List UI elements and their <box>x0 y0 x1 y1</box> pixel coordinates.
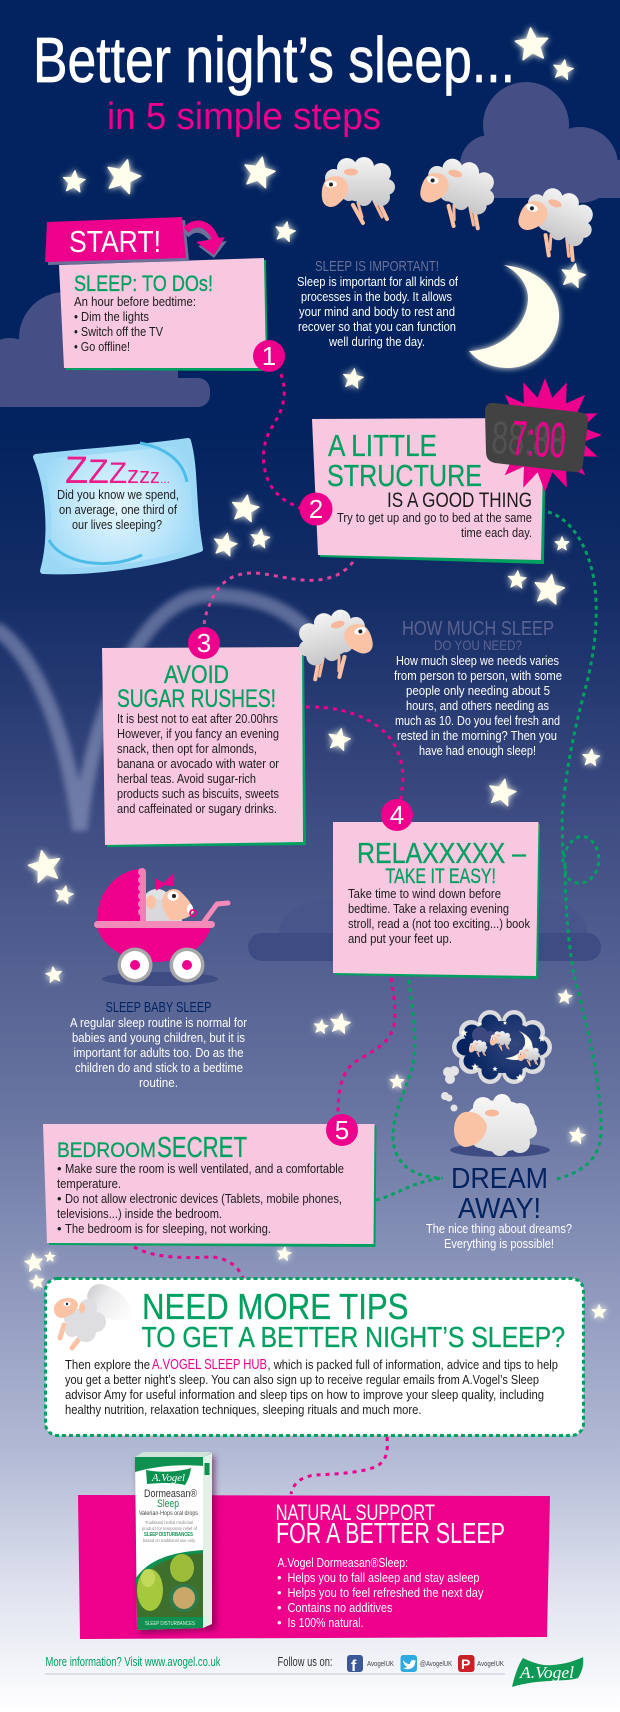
icon: dream thought bubble <box>441 1010 552 1112</box>
badge: 5: 5 <box>335 1115 349 1145</box>
badge: 4: 4 <box>390 800 404 830</box>
text: bedroom tips: • <box>57 1191 62 1206</box>
text: product benefits: • <box>277 1600 282 1615</box>
icon: pinterest: P <box>461 1656 470 1672</box>
text: sugar: herbal teas. Avoid sugar-rich <box>117 771 256 786</box>
panel: step 3 avoid sugar rushes <box>102 647 306 847</box>
icon: facebook <box>347 1655 394 1675</box>
stars <box>24 27 606 1318</box>
text: how much sleep: much as 10. Do you feel fresh and <box>395 713 560 728</box>
icon: facebook: f <box>351 1658 357 1675</box>
text: bedroom tips: • <box>57 1221 62 1236</box>
icon: pram with baby sheep <box>94 868 228 986</box>
banner: start <box>45 217 189 265</box>
logo: a.vogel: A.Vogel <box>519 1663 574 1682</box>
text: tips body: healthy nutrition, relaxation techniques, sleeping rituals and much more. <box>65 1402 422 1417</box>
text: relax: stroll, read a (not too exciting...) book <box>348 916 530 931</box>
icon: alarm clock: 7:00 <box>510 410 567 469</box>
text: sugar: However, if you fancy an evening <box>117 726 279 741</box>
icon: pillow: our lives sleeping? <box>72 517 162 532</box>
text: how much sleep: DO YOU NEED? <box>434 637 522 653</box>
counting sheep <box>322 152 601 266</box>
text: relax: and put your feet up. <box>348 931 452 946</box>
product box: SLEEP DISTURBANCES <box>145 1621 195 1627</box>
icon: twitter <box>400 1655 452 1672</box>
cloud: lower right <box>248 900 601 961</box>
path: step 5 to tips <box>134 1247 243 1278</box>
badge: 2: 2 <box>309 494 323 524</box>
heading: dream away: AWAY! <box>458 1193 541 1225</box>
panel: natural support <box>78 1495 550 1639</box>
text: how much sleep: rested in the morning? Then you <box>397 728 557 743</box>
text: bedroom tips: The bedroom is for sleeping, not working. <box>65 1221 271 1236</box>
text: product benefits: • <box>277 1585 282 1600</box>
badge: 3 <box>188 627 220 659</box>
panel: step 2 a little structure: STRUCTURE <box>327 458 482 493</box>
footer <box>45 1655 583 1687</box>
text: how much sleep: have had enough sleep! <box>419 743 536 758</box>
badge: 4 <box>381 799 413 831</box>
text: sugar: and caffeinated or sugary drinks. <box>117 801 277 816</box>
text: follow us: Follow us on: <box>278 1655 332 1669</box>
text: more information: More information? Visit www.avogel.co.uk <box>46 1655 221 1669</box>
heading: to dos: SLEEP: TO DOs! <box>74 271 213 296</box>
logo: box: A.Vogel <box>151 1473 185 1484</box>
panel: step 2 a little structure: time each day. <box>461 525 532 540</box>
heading: avoid sugar rushes: AVOID <box>164 661 229 689</box>
product box <box>135 1452 216 1634</box>
logo: a.vogel <box>512 1657 583 1687</box>
panel: natural support: FOR A BETTER SLEEP <box>276 1518 505 1550</box>
text: bedroom tips: Make sure the room is well ventilated, and a comfortable <box>65 1161 344 1176</box>
logo: box <box>146 1468 191 1485</box>
icon: pillow: on average, one third of <box>59 502 177 517</box>
icon: sleeping sheep <box>450 1094 550 1157</box>
heading: zzz: ZZZzzz... <box>65 450 170 492</box>
heading: dream away <box>426 1163 572 1251</box>
text: bedroom tips: Do not allow electronic devices (Tablets, mobile phones, <box>65 1191 342 1206</box>
text: sleep baby sleep: routine. <box>139 1075 178 1090</box>
text: how much sleep: people only needing about 5 <box>406 683 550 698</box>
text: tips body: advisor Amy for useful information and sleep tips on how to improve your sleep quality, including <box>65 1387 544 1402</box>
text: sleep is important: SLEEP IS IMPORTANT! <box>315 258 439 275</box>
product box: based on traditional use only <box>143 1538 196 1543</box>
text: product benefits: Is 100% natural. <box>288 1615 364 1630</box>
heading: natural support: NATURAL SUPPORT <box>276 1500 435 1525</box>
text: how much sleep <box>394 618 562 758</box>
text: sleep baby sleep: babies and young children, but it is <box>72 1030 245 1045</box>
subheading: is a good thing: IS A GOOD THING <box>387 489 532 512</box>
text: bedroom tips <box>57 1161 344 1236</box>
path: step 5 to dream <box>376 1178 443 1200</box>
text: sleep is important: recover so that you can function <box>298 319 456 334</box>
text: sleep is important: your mind and body to rest and <box>299 304 455 319</box>
icon: sheep on box <box>291 603 379 685</box>
text: product benefits: Helps you to feel refreshed the next day <box>288 1585 484 1600</box>
text: how much sleep: How much sleep we needs varies <box>396 653 559 668</box>
text: bedroom tips: televisions...) inside the bedroom. <box>57 1206 222 1221</box>
text: product benefits: A.Vogel Dormeasan®Sleep: <box>278 1555 408 1570</box>
text: tips body: you get a better night’s sleep. You can also sign up to receive regular emails from A.Vogel’s Sleep <box>65 1372 539 1387</box>
sheep jump arc <box>0 595 312 830</box>
banner: start: START! <box>69 224 161 259</box>
text: relax: Take time to wind down before <box>348 886 501 901</box>
text: product benefits: • <box>277 1615 282 1630</box>
text: product benefits <box>277 1555 484 1630</box>
text: sleep baby sleep: children do and stick to a bedtime <box>75 1060 243 1075</box>
icon: alarm clock: 88:88 <box>490 411 567 467</box>
text: sleep is important: Sleep is important for all kinds of <box>297 274 458 289</box>
path: step 2 to step 3 <box>204 562 353 628</box>
product box: Traditional herbal medicinal <box>145 1520 193 1525</box>
product box: SLEEP DISTURBANCES <box>144 1532 193 1538</box>
text: sugar: It is best not to eat after 20.00hrs <box>117 711 278 726</box>
icon: angel sheep <box>54 1284 132 1348</box>
cloud: top right <box>460 82 620 203</box>
text: relax: bedtime. Take a relaxing evening <box>348 901 509 916</box>
text: how much sleep: hours, and others needing as <box>406 698 549 713</box>
badge: 1: 1 <box>262 341 276 371</box>
text: bedroom tips: temperature. <box>57 1176 121 1191</box>
icon: pinterest <box>458 1655 504 1672</box>
heading: bedroom secret: BEDROOM <box>57 1139 156 1162</box>
text: sleep baby sleep: SLEEP BABY SLEEP <box>106 999 212 1016</box>
text: sleep is important: well during the day. <box>328 334 425 349</box>
badge: 3: 3 <box>197 628 211 658</box>
icon: pinterest: AvogelUK <box>477 1659 504 1668</box>
text: sleep is important: processes in the body. It allows <box>301 289 452 304</box>
subtitle: in 5 simple steps <box>107 96 381 138</box>
text: product benefits: • <box>277 1570 282 1585</box>
text: sleep baby sleep: A regular sleep routine is normal for <box>70 1015 248 1030</box>
text: sleep baby sleep <box>70 999 248 1090</box>
heading: a little structure: A LITTLE <box>328 428 437 463</box>
text: bedroom tips: • <box>57 1161 62 1176</box>
path: tips to product <box>291 1437 387 1494</box>
badge: 1 <box>253 340 285 372</box>
heading: relaxxxxx: RELAXXXXX – <box>357 838 527 870</box>
badge: 5 <box>326 1114 358 1146</box>
text: sugar <box>117 711 280 816</box>
panel: step 4 relax: TAKE IT EASY! <box>386 865 496 888</box>
heading: dream away: DREAM <box>451 1163 548 1195</box>
path: step 2 to dream <box>548 512 601 1180</box>
text: to do list: An hour before bedtime: <box>74 294 196 309</box>
heading: need more tips: NEED MORE TIPS <box>142 1286 408 1327</box>
path: step 3 to step 4 <box>306 707 403 800</box>
path: step 1 to step 2 <box>263 374 300 508</box>
panel: step 1 to dos <box>59 258 268 371</box>
cloud: left <box>0 292 210 407</box>
text: how much sleep: HOW MUCH SLEEP <box>402 618 554 640</box>
text: to do list: • Dim the lights <box>74 309 149 324</box>
panel: step 2 a little structure <box>312 418 546 564</box>
text: did you know: Did you know we spend, <box>57 487 179 502</box>
heading: dream away: Everything is possible! <box>444 1236 554 1251</box>
title: Better night’s sleep... <box>33 24 515 96</box>
product box: Dormeasan® <box>144 1488 197 1500</box>
text: dreams: The nice thing about dreams? <box>426 1221 572 1236</box>
icon: facebook: AvogelUK <box>367 1659 394 1668</box>
moon <box>469 265 559 368</box>
text: to do list: • Switch off the TV <box>74 324 163 339</box>
text: tips body: , which is packed full of information, advice and tips to help <box>268 1357 558 1372</box>
text: structure: Try to get up and go to bed at the same <box>337 510 532 525</box>
starburst <box>488 378 602 492</box>
text: tips body: Then explore the <box>65 1357 150 1372</box>
panel: step 3 avoid sugar rushes: SUGAR RUSHES! <box>117 685 276 713</box>
product box: product for temporary relief of <box>142 1526 198 1531</box>
text: relax <box>348 886 530 946</box>
text: tips body <box>65 1356 558 1417</box>
panel: step 5 bedroom secret: SECRET <box>157 1132 247 1164</box>
panel: need more tips <box>46 1278 584 1436</box>
text: how much sleep: from person to person, with some <box>394 668 562 683</box>
text: sugar: snack, then opt for almonds, <box>117 741 257 756</box>
product box: Valerian-Hops oral drops <box>139 1510 199 1517</box>
text: sugar: banana or avocado with water or <box>117 756 280 771</box>
text: product benefits: Contains no additives <box>288 1600 393 1615</box>
text: to do list: • Go offline! <box>74 339 130 354</box>
arrow: start <box>186 224 227 258</box>
icon: twitter: @AvogelUK <box>420 1659 452 1668</box>
path: step 4 to step 5 <box>338 978 395 1114</box>
icon: pillow <box>36 441 200 571</box>
text: tips body: A.VOGEL SLEEP HUB <box>152 1356 267 1373</box>
panel: step 4 relax <box>333 822 540 979</box>
text: sleep is important <box>297 258 458 349</box>
path: step 4 to dream <box>393 980 443 1178</box>
text: sleep baby sleep: important for adults too. Do as the <box>74 1045 244 1060</box>
text: sugar: products such as biscuits, sweets <box>117 786 279 801</box>
text: product benefits: Helps you to fall asleep and stay asleep <box>288 1570 480 1585</box>
panel: step 5 bedroom secret <box>43 1124 376 1247</box>
icon: alarm clock <box>485 403 588 472</box>
text: to do list <box>74 294 196 354</box>
badge: 2 <box>300 492 332 526</box>
product box: Sleep <box>157 1498 179 1510</box>
